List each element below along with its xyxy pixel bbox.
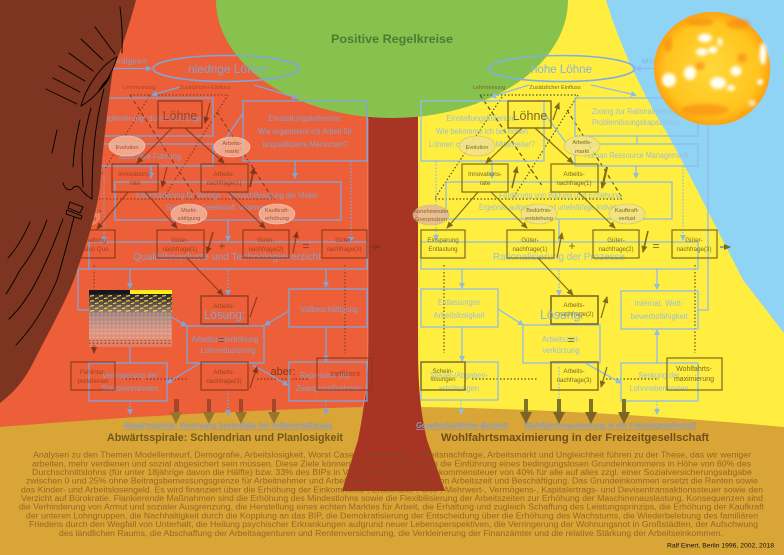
- ovals: mechanisms: Bedürfnis-: [526, 208, 552, 214]
- ovals: mechanisms: [69, 136, 295, 226]
- ovals: mechanisms: Markt-: [181, 208, 197, 214]
- blue box texts: unqualifizierte Menschen?: [262, 140, 348, 149]
- olive box texts: [427, 109, 714, 384]
- body text: des ländlichen Raums, die Abschaffung der Arbeitsagenturen und Rentenversicherung, die Verkleinerung der Finanzämter und die relative Stärkung der Arbeitseinkommen.: [59, 529, 723, 538]
- olive box texts: Güter-: [607, 237, 625, 244]
- blue box texts: Vollbeschäftigung: [300, 305, 358, 314]
- ovals: mechanisms: Kaufkraft-: [265, 208, 289, 214]
- body text: das Kinder- und Arbeitslosengeld. Es wird finanziert über die Erhöhung der Einkommens-, Erbschafts-, Öko-, Mehrwert-, Vermögens-, Kapitalertrags- und Devisentransaktionssteuer sowie den: [21, 486, 763, 494]
- blue box texts: „Optimierung“ durch Kürzungen: [100, 114, 206, 123]
- oversized operators: =: [652, 239, 660, 253]
- influence labels: Zusätzlicher Einfluss: [529, 85, 581, 91]
- blue box texts: Lohnreduzierung: [200, 346, 256, 355]
- ovals: mechanisms: Kaufkraft-: [615, 208, 639, 214]
- olive box texts: nachfrage(3): [676, 246, 712, 253]
- influence labels: Lehrmeinung: [123, 85, 155, 91]
- olive box texts: Schein-: [433, 368, 453, 375]
- olive box texts: Güter-: [521, 237, 539, 244]
- blue boxes: [421, 98, 698, 401]
- blue box texts: Elitenförderung für Wenige - Vernachlässigung der Vielen: [136, 191, 318, 200]
- blue box texts: Human Ressource Management: [584, 151, 689, 160]
- face profile: [0, 0, 136, 403]
- blue box texts: Spaltung der Gesellschaft, Verarmung: [166, 203, 268, 212]
- blue box texts: Lohnnebenkosten: [630, 384, 688, 393]
- olive box texts: rate: [480, 180, 491, 187]
- olive box texts: Güter-: [685, 237, 703, 244]
- panel: left cycle (niedrige Löhne): [69, 56, 380, 444]
- body text: zwischen 0 und 25% ohne Beitragsbemessungsgrenze für Arbeitnehmer und Arbeitgeber in Abhängigkeit von Arbeitszeit und Beschäftigung. Das Grundeinkommen ersetzt die Renten sowie: [26, 476, 759, 486]
- olive box texts: nachfrage(3): [556, 377, 592, 384]
- tree crown: [216, 0, 568, 118]
- label: Mündigkeit: Mündigkeit: [642, 56, 685, 66]
- blue box texts: Zwang zur Rationalisierung,: [592, 107, 680, 116]
- thick arrows: left: [170, 399, 280, 424]
- brown box texts: nachfrage(1): [206, 180, 242, 187]
- brown box texts: nachfrage(1): [162, 246, 198, 253]
- heading: Wohlfahrtsmaximierung: Wohlfahrtsmaximierung in der Freizeitgesellschaft: [441, 432, 709, 444]
- oval: hohe Löhne: hohe Löhne: [531, 62, 592, 76]
- olive box texts: Entlastung: [428, 246, 458, 253]
- heading: Abwärtsspirale: Abwärtsspirale: Schlendrian und Planlosigkeit: [107, 432, 343, 444]
- background: yellow field: [392, 0, 784, 440]
- blue box texts: Verringerung der: [102, 371, 158, 380]
- signature: Ralf Einert, Berlin 1996, 2002, 2018: [667, 542, 774, 550]
- heading: Lösung: Lösung:: [540, 307, 584, 322]
- face line drawing: [6, 7, 122, 345]
- oversized operators: =: [567, 333, 575, 347]
- oval: niedrige Löhne: niedrige Löhne: [188, 62, 267, 76]
- olive box texts: Wohlfahrts-: [676, 366, 712, 373]
- brown box texts: rate: [130, 180, 141, 187]
- trunk edge highlight: [363, 118, 368, 407]
- ovals: mechanisms: Evolution: [465, 145, 489, 151]
- brown box texts: nachfrage(3): [206, 378, 242, 385]
- brown box texts: Fehlinter-: [80, 369, 106, 376]
- dotted mini picture: [89, 290, 172, 353]
- thick arrows: right: [520, 399, 630, 424]
- brown box texts: Erhaltung: [80, 237, 107, 244]
- blue box texts: Rationalisierung der Prozesse: [493, 251, 625, 263]
- ovals: mechanisms: markt: [225, 149, 239, 155]
- influence labels: [473, 85, 581, 91]
- oval: niedrige Löhne: [153, 56, 299, 82]
- blue box texts: Arbeitslosigkeit: [434, 311, 485, 320]
- dotted triangles: [435, 95, 695, 379]
- label: Mündigkeit: Mündigkeit: [105, 56, 147, 66]
- background: ground: [0, 407, 784, 555]
- blue box texts: Repression und: [300, 371, 350, 380]
- ovals: mechanisms: verlust: [619, 216, 636, 222]
- olive box texts: maximierung: [674, 376, 714, 383]
- blue box texts: Senkung der: [638, 371, 680, 380]
- blue boxes: [78, 98, 367, 401]
- brown box texts: Status Quo: [78, 246, 109, 253]
- blue box texts: Staatseinnahmen: [102, 384, 158, 393]
- pupil: [97, 75, 111, 93]
- blue box texts: erhöhungen: [439, 384, 479, 393]
- body text: Durchschnittslohns (für unter 18jährige davon die Hälfte) bzw. 33% des BIPs in Verbindung mit einer Einkommensteuer von 40% für alle auf alles zzgl. einer Sozialversicherungsabgabe: [32, 468, 753, 477]
- ovals: mechanisms: erhöhung: [265, 216, 289, 222]
- ovals: mechanisms: Grenznutzen: [415, 217, 447, 223]
- blue box texts: Problemlösungskapazitäten: [592, 118, 680, 127]
- brown box texts: Löhne: [163, 109, 197, 123]
- blue box texts: Einstellungskriterium:: [268, 114, 342, 123]
- blue box texts: Internat. Wett-: [634, 299, 684, 308]
- tree trunk: [342, 100, 445, 491]
- panel: right cycle (hohe Löhne): [413, 56, 730, 444]
- brown box texts: nachfrage(3): [326, 246, 362, 253]
- blue box texts: bewerbsfähigkeit: [630, 312, 688, 321]
- blue arrows: [436, 68, 708, 415]
- ovals: mechanisms: Zunehmende: [69, 209, 101, 215]
- oversized operators: [567, 239, 660, 347]
- brown box texts: [78, 109, 362, 385]
- link: Gesellschaftlicher Boykott: Gesellschaftlicher Boykott: [416, 421, 508, 430]
- olive arrows: [447, 103, 730, 387]
- ovals: mechanisms: entstehung: [525, 216, 553, 222]
- oval: hohe Löhne: [489, 56, 635, 82]
- blue box texts: Wie bekomme ich bei hohen: [436, 127, 528, 136]
- blue box texts: autoritäre Führung: [119, 152, 181, 161]
- olive box texts: Arbeits-: [563, 302, 585, 309]
- body text: Verzicht auf Bürokratie. Flankierende Maßnahmen sind die Erhöhung des Mindestlohns sowie die Flexibilisierung der Arbeitszeiten zur Erhöhung der Maschinenauslastung. Konsequenzen sind: [21, 494, 763, 503]
- oversized operators: =: [302, 239, 310, 253]
- oversized operators: +: [568, 239, 576, 253]
- ovals: mechanisms: Arbeits-: [572, 140, 592, 146]
- ovals: mechanisms: sättigung: [178, 216, 200, 222]
- olive box texts: nachfrage(2): [598, 246, 634, 253]
- influence labels: Lehrmeinung: [473, 85, 505, 91]
- brown box texts: Güter-: [171, 237, 189, 244]
- oversized operators: [217, 239, 310, 347]
- blue box texts: Entlassungen: [438, 298, 480, 307]
- link: Wohlfahrtsmaximierung: Wohlfahrtsmaximierung in der Freizeitgesellschaft: [524, 421, 696, 430]
- body text: Analysen zu den Themen Modellentwurf, Demografie, Arbeitslosigkeit, Worst Case, Lebenszyklus, Arbeitsnachfrage, Arbeitsmarkt und Ungleichheit führen zu der These, das wir weniger: [33, 450, 751, 460]
- olive box texts: Arbeits-: [563, 171, 585, 178]
- body text: Friedens durch den Wegfall von Unterhalt, die Heilung psychischer Erkrankungen aufgrund neuer Lebensperspektiven, die Verringerung der Wohnungsnot in Großstädten, der Aufschwung: [29, 520, 758, 529]
- brown box texts: pretationen: [78, 378, 109, 385]
- blue box texts: Löhnen qualifizierte Mitarbeiter?: [429, 140, 536, 149]
- ovals: mechanisms: markt: [575, 149, 589, 155]
- olive box texts: Arbeits-: [563, 368, 585, 375]
- title: Positive Regelkreise: [331, 32, 453, 46]
- blue box texts: Förderung von Bildung und Erziehung: [499, 191, 621, 200]
- brown box texts: Güter-: [335, 237, 353, 244]
- olive boxes: [421, 101, 722, 390]
- ovals: mechanisms: Kaufkraft: [74, 217, 97, 223]
- body text: die Verhinderung von Armut und sozialer Ausgrenzung, die Herstellung eines echten Marktes für Arbeit, die Erhaltung und zugleich Schaffung des Leistungsprinzips, die Erhöhung der Kaufkraft: [19, 502, 765, 512]
- olive box texts: Einsparung: [427, 237, 459, 244]
- blue box texts: Arbeitszeiterhöhung: [192, 335, 258, 344]
- brown box texts: Arbeits-: [213, 303, 235, 310]
- face fill: [0, 0, 136, 403]
- ovals: mechanisms: [413, 136, 645, 225]
- ovals: mechanisms: Abnehmender: [413, 209, 449, 215]
- background: orange-red field: [0, 0, 392, 440]
- brown boxes: [71, 101, 372, 390]
- link: Abwärtsspirale Verarmung: Abwärtsspirale: Verarmung bestenfalls bei Vollbeschäftigung: [124, 421, 333, 430]
- olive box texts: Löhne: [513, 109, 547, 123]
- brown box texts: Ineffizient: [330, 371, 360, 378]
- olive box texts: nachfrage(2): [558, 311, 594, 318]
- body text: der unteren Lohngruppen, die Nachhaltigkeit durch die Kopplung an das BIP, die Demokratisierung der Entscheidung über die Erhöhung des Wachstums, die Wiederbelebung des familiären: [26, 512, 758, 520]
- body text: [19, 450, 765, 538]
- blue box texts: Ergebnis: aufgeklärte und urteilsfähige Individuen: [479, 203, 627, 212]
- body text: arbeiten, mehr verdienen und sozial abgesichert sein müssen. Diese Ziele können erreicht werden durch die Einführung eines bedingungslosen Grundeinkommens in Höhe von 60% des: [32, 460, 751, 468]
- dotted triangles: [92, 95, 345, 379]
- blue box texts: Wie organisiere ich Arbeit für: [258, 127, 352, 136]
- brown box texts: Arbeits-: [213, 171, 235, 178]
- blue box texts: verkürzung: [542, 346, 580, 355]
- olive box texts: Innovations-: [468, 171, 502, 178]
- blue box texts: [429, 107, 689, 393]
- olive box texts: nachfrage(1): [512, 246, 548, 253]
- olive box texts: nachfrage(1): [556, 180, 592, 187]
- olive box texts: lösungen: [430, 376, 456, 383]
- heading: Lösung: Lösung:: [204, 307, 245, 322]
- blue box texts: Zwangsmaßnahmen: [296, 384, 362, 393]
- influence labels: Zusätzlicher Einfluss: [179, 85, 231, 91]
- oversized operators: +: [218, 239, 226, 253]
- blue box texts: Arbeitszeit-: [542, 335, 580, 344]
- brown arrows: [97, 103, 380, 388]
- brown box texts: Innovations-: [118, 171, 152, 178]
- influence labels: [123, 85, 231, 91]
- oversized operators: =: [217, 333, 225, 347]
- blue box texts: Steuer-/Abgaben-: [430, 371, 488, 380]
- blue box texts: Einstellungskriterium:: [446, 114, 518, 123]
- blue box texts: [100, 114, 362, 393]
- brown box texts: Güter-: [257, 237, 275, 244]
- blue arrows: [78, 68, 351, 415]
- brown box texts: Arbeits-: [213, 369, 235, 376]
- ovals: mechanisms: Arbeits-: [222, 141, 242, 147]
- brown box texts: nachfrage(2): [248, 246, 284, 253]
- heading: aber: aber:: [270, 366, 296, 378]
- blue box texts: Qualitätsverluste und Technologieverzicht: [133, 251, 321, 263]
- ovals: mechanisms: Evolution: [115, 145, 139, 151]
- sun: [654, 12, 770, 125]
